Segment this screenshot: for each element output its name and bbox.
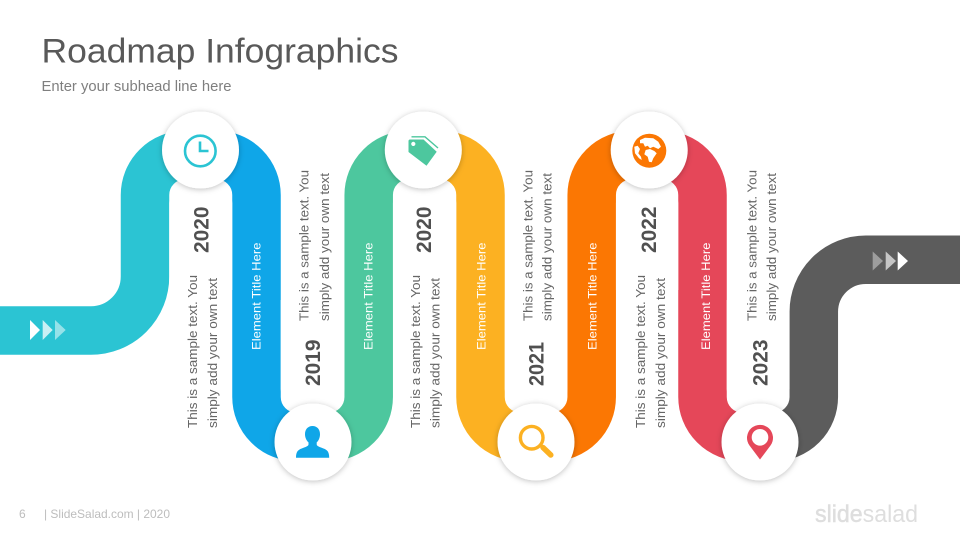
logo: slidesalad: slidesalad <box>815 501 918 528</box>
icon: magnifier <box>520 426 551 455</box>
node: tag <box>385 112 462 188</box>
column 1 text: 2020: 2020 <box>190 206 214 253</box>
column 4 text: 2021 <box>521 170 555 386</box>
roadmap ribbon: dark exit segment <box>760 260 960 437</box>
column 1 text: 2020: This is a sample text. You <box>186 275 200 428</box>
element title: green: Element Title Here <box>362 242 376 350</box>
column 4 text: 2021: 2021 <box>526 342 548 386</box>
arrows: exit chevrons <box>873 252 908 270</box>
node: globe <box>611 112 688 188</box>
column 3 text: 2020 <box>409 206 442 428</box>
column 3 text: 2020: This is a sample text. You <box>409 275 423 428</box>
roadmap ribbon: green segment <box>313 155 423 437</box>
column 6 text: 2023: 2023 <box>750 340 773 386</box>
element title: yellow: Element Title Here <box>474 242 488 350</box>
footer: page number: 6 <box>19 507 26 521</box>
column 3 text: 2020: simply add your own text <box>428 277 442 428</box>
subhead: Enter your subhead line here <box>42 79 232 95</box>
icon: tag <box>408 137 438 166</box>
column 6 text: 2023 <box>746 170 779 386</box>
element title: orange: Element Title Here <box>586 242 600 350</box>
node: clock <box>162 112 239 188</box>
column 2 text: 2019: simply add your own text <box>318 172 332 321</box>
column 2 text: 2019 <box>298 170 332 386</box>
element title: red: Element Title Here <box>699 242 713 350</box>
column 5 text: 2022: simply add your own text <box>654 277 668 428</box>
node: person <box>274 404 352 480</box>
column 5 text: 2022: This is a sample text. You <box>634 275 648 428</box>
column 6 text: 2023: simply add your own text <box>765 172 779 321</box>
column 1 text: 2020: simply add your own text <box>206 277 220 428</box>
column 3 text: 2020: 2020 <box>413 206 436 253</box>
icon: location pin <box>747 425 773 460</box>
column 5 text: 2022 <box>634 206 668 428</box>
node: magnifier <box>498 404 574 480</box>
node: pin <box>722 404 798 480</box>
icon: globe <box>632 134 666 168</box>
roadmap ribbon: blue segment <box>200 155 313 437</box>
icon: person <box>296 426 329 458</box>
column 2 text: 2019: 2019 <box>302 340 325 386</box>
roadmap ribbon: red segment <box>649 155 760 437</box>
column 5 text: 2022: 2022 <box>638 206 661 253</box>
column 1 text: 2020 <box>186 206 220 428</box>
footer: source: | SlideSalad.com | 2020 <box>44 507 170 521</box>
arrows: entry chevrons <box>30 320 66 340</box>
column 2 text: 2019: This is a sample text. You <box>298 170 312 321</box>
column 4 text: 2021: This is a sample text. You <box>521 170 535 321</box>
element title: blue: Element Title Here <box>250 242 264 350</box>
column 6 text: 2023: This is a sample text. You <box>746 170 760 321</box>
roadmap ribbon: cyan entry segment <box>0 155 200 330</box>
icon: clock <box>185 136 216 166</box>
roadmap ribbon: orange segment <box>536 155 649 437</box>
roadmap ribbon: yellow segment <box>423 155 536 437</box>
column 4 text: 2021: simply add your own text <box>541 172 555 321</box>
title: Roadmap Infographics <box>42 32 398 70</box>
